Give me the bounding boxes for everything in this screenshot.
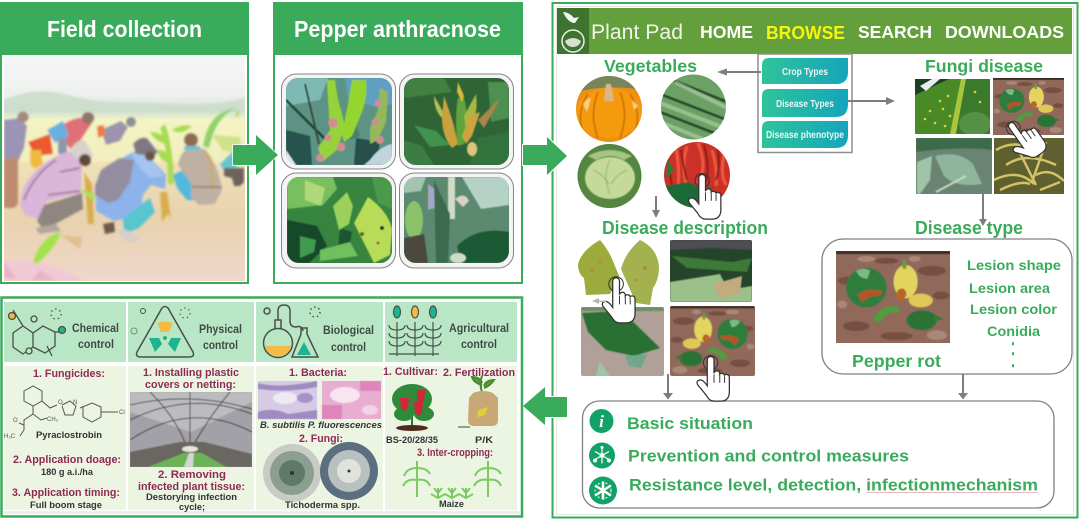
label: biological control: Biological — [323, 325, 374, 337]
blue person — [96, 151, 166, 221]
photo: dried pods — [994, 138, 1064, 194]
icon: info — [590, 409, 614, 433]
column: chemical control: Full boom stage — [30, 500, 102, 511]
diagram: pyraclostrobin structure: O — [13, 418, 18, 424]
corn stalks and sprouts — [84, 172, 171, 224]
photo: cabbage — [577, 144, 642, 209]
icon: pointer on fungi photo — [999, 112, 1049, 166]
photo: pepper rot — [670, 306, 755, 376]
icon: maize intercropping — [403, 461, 501, 498]
browse menu: Disease Types — [776, 98, 834, 110]
heading: pepper anthracnose — [273, 2, 523, 55]
navigation bar — [557, 8, 1072, 54]
far right person — [220, 150, 238, 174]
diagram: pyraclostrobin structure: CH₃ — [47, 417, 59, 423]
photo: chili peppers — [664, 142, 730, 208]
navigation bar: BROWSE — [766, 23, 845, 43]
label: chemical control: control — [78, 339, 114, 351]
photo: corn leaf disease — [915, 79, 991, 136]
photo: wilted leaf pile — [670, 240, 752, 302]
arrow: fungi to disease type — [979, 194, 987, 226]
header cells — [4, 302, 517, 362]
label: physical control: Physical — [199, 324, 242, 336]
photo: yellowing fruits — [404, 78, 509, 165]
illustration: researchers in the field — [4, 55, 245, 281]
panel: control measures — [2, 298, 522, 516]
heading: pepper anthracnose: Pepper anthracnose — [294, 16, 501, 42]
column: agricultural control: BS-20/28/35 — [386, 435, 439, 446]
column: agricultural control: 3. Inter-cropping: — [417, 447, 493, 459]
column: physical control — [130, 367, 252, 513]
column: physical control: 2. Removing — [158, 469, 226, 481]
column: biological control: Tichoderma spp. — [285, 500, 360, 511]
panel: Plant Pad database — [552, 3, 1078, 518]
column: agricultural control: Maize — [439, 499, 464, 510]
browse menu — [758, 54, 852, 152]
photo: wilted stem — [404, 177, 509, 263]
navigation bar: HOME — [700, 22, 753, 42]
column: chemical control: 1. Fungicides: — [33, 368, 105, 380]
text: prevention: Prevention and control measures — [628, 448, 909, 466]
navigation bar: Plant Pad — [591, 21, 683, 44]
arrow: field to pepper — [233, 135, 278, 175]
column: chemical control: 180 g a.i./ha — [41, 467, 94, 478]
heading: disease type: Disease type — [915, 218, 1023, 238]
list: lesion traits: Lesion area — [969, 281, 1051, 296]
photo: petri dish white — [320, 442, 378, 500]
photo: petri dish green — [263, 444, 321, 502]
arrow: small gray left — [592, 298, 606, 304]
label: physical control: control — [203, 340, 238, 352]
icon: info: i — [599, 412, 604, 431]
navigation bar: DOWNLOADS — [945, 22, 1064, 42]
panel: disease information — [582, 401, 1054, 508]
panel: disease type card — [822, 239, 1072, 374]
column: agricultural control: P/K — [475, 435, 493, 446]
heading: fungi disease: Fungi disease — [925, 56, 1043, 76]
photo: pumpkin — [576, 76, 642, 142]
diagram: pyraclostrobin structure — [4, 386, 125, 440]
arrow: menu to vegetables — [717, 68, 761, 76]
icon: chemical — [8, 309, 66, 356]
column: agricultural control: 1. Cultivar: — [383, 366, 438, 378]
column: physical control: cycle; — [179, 502, 205, 513]
photo: spotted leaves — [287, 177, 392, 263]
list: lesion traits: Lesion color — [970, 302, 1058, 317]
list: lesion traits: Lesion shape — [967, 258, 1062, 273]
beige person — [173, 169, 197, 200]
label: chemical control: Chemical — [72, 323, 119, 335]
list: lesion traits: Conidia — [987, 324, 1041, 339]
column: physical control: infected plant tissue: — [138, 481, 245, 493]
logo — [557, 8, 589, 54]
browse menu: Disease phenotype — [766, 129, 844, 141]
column: chemical control: 3. Application timing: — [12, 487, 120, 499]
column: chemical control: Pyraclostrobin — [36, 430, 102, 441]
column: chemical control — [4, 368, 125, 511]
arrow: database to control — [523, 387, 567, 425]
heading: field collection — [0, 2, 249, 55]
photo: greenhouse — [130, 392, 252, 467]
text: resistance: Resistance level, detection, infectionmechanism — [629, 476, 1038, 494]
pink person — [20, 151, 82, 219]
browse menu: Crop Types — [782, 66, 828, 78]
arrow: vegetables to description — [652, 196, 660, 218]
heading: field collection: Field collection — [47, 16, 202, 42]
label: agricultural control: control — [461, 339, 497, 351]
label: biological control — [323, 325, 374, 354]
corn plants — [203, 108, 236, 148]
column: agricultural control: 2. Fertilization — [443, 367, 515, 379]
photo: pepper rot large — [836, 251, 950, 343]
icon: pointer on rot photo — [697, 356, 729, 401]
photo: spotted leaves pair — [578, 240, 659, 305]
background people — [4, 118, 27, 162]
label: physical control — [199, 324, 242, 352]
photo: green leaf on ground — [581, 307, 664, 376]
icon: physical — [131, 306, 194, 357]
photo: anthracnose on green fruit — [286, 78, 392, 165]
diagram: pyraclostrobin structure: H₃C — [4, 434, 16, 440]
column: agricultural control — [383, 366, 515, 510]
micrograph: P. fluorescences — [322, 381, 381, 419]
column: biological control — [258, 367, 382, 511]
icon: pointer on pepper — [689, 174, 721, 219]
photo frames — [282, 74, 514, 268]
arrow: menu to fungi — [848, 97, 895, 105]
photo: pepper rot thumbnail — [993, 78, 1064, 135]
icon: network — [589, 442, 615, 468]
icon: fertilizer sack — [458, 376, 498, 427]
panel: field collection — [0, 2, 249, 283]
text: basic situation: Basic situation — [627, 415, 753, 433]
column: physical control: Destorying infection — [146, 492, 237, 503]
label: pepper rot: Pepper rot — [852, 351, 941, 371]
micrograph: B. subtilis — [258, 381, 317, 419]
icon: biological — [264, 305, 320, 358]
column: chemical control: 2. Application doage: — [13, 454, 121, 466]
arrow: description to summary — [663, 374, 673, 400]
arrow: pepper to database — [523, 137, 567, 175]
arrow: type to summary — [958, 374, 968, 400]
column: physical control: 1. Installing plastic — [143, 367, 239, 379]
body cells — [4, 366, 517, 510]
column: physical control: covers or netting: — [145, 379, 236, 391]
icon: pepper plant — [392, 384, 434, 431]
label: chemical control — [72, 323, 119, 351]
heading: vegetables: Vegetables — [604, 56, 697, 76]
label: biological control: control — [331, 342, 366, 354]
column: biological control: 1. Bacteria: — [289, 367, 347, 379]
list: lesion traits — [967, 258, 1062, 366]
heading: disease description: Disease description — [602, 218, 768, 238]
panel: pepper anthracnose — [273, 2, 523, 283]
diagram: pyraclostrobin structure: N — [73, 400, 77, 406]
label: agricultural control: Agricultural — [449, 323, 509, 335]
diagram: pyraclostrobin structure: O — [58, 400, 63, 406]
label: agricultural control — [449, 323, 509, 351]
photo: cucumbers — [661, 74, 726, 140]
icon: agricultural — [389, 306, 441, 356]
photo: soybean leaf — [916, 138, 992, 194]
icon: pointer on leaves — [602, 277, 635, 323]
diagram: pyraclostrobin structure: Cl — [119, 410, 125, 416]
column: biological control: B. subtilis P. fluorescences — [260, 420, 382, 431]
navigation bar: SEARCH — [858, 22, 932, 42]
column: biological control: 2. Fungi: — [299, 433, 343, 445]
icon: snowflake cell — [589, 476, 617, 504]
